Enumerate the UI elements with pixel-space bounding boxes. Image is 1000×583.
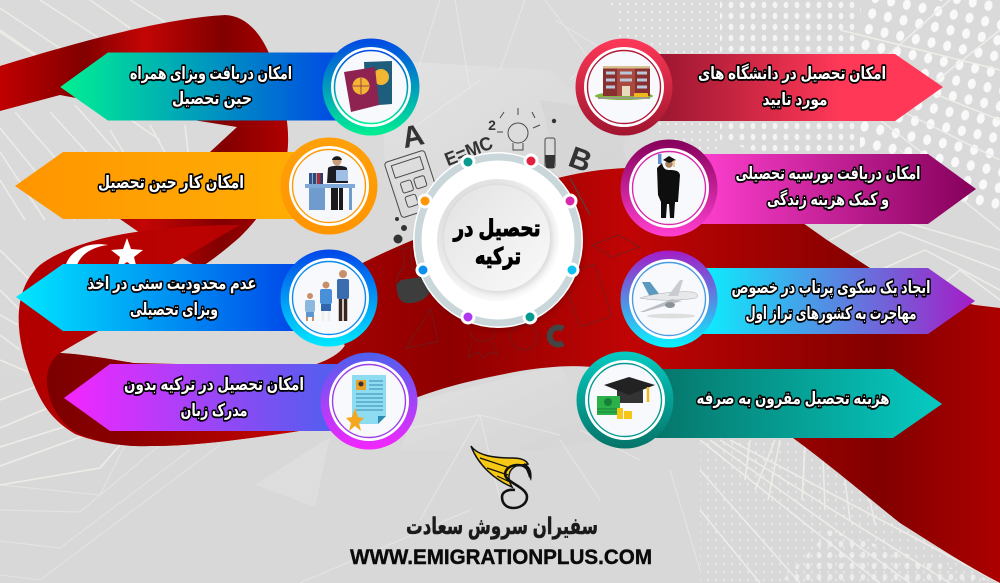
hub title: ترکیه	[475, 243, 521, 270]
panel: scholarship and living allowance	[620, 140, 976, 236]
label: امکان دریافت بورسیه تحصیلی	[736, 164, 920, 184]
logo: bird emblem	[471, 446, 532, 508]
label: مهاجرت به کشورهای تراز اول	[746, 304, 916, 324]
grey wedge between ribbon folds	[60, 300, 345, 370]
panel: study without language certificate	[64, 352, 418, 450]
education doodles	[384, 108, 640, 358]
icon: Turkish flag crescent and star	[65, 238, 143, 269]
label: ایجاد یک سکوی پرتاب در خصوص	[732, 278, 930, 298]
icon circle: graduate	[620, 140, 718, 236]
arrow banner	[650, 369, 942, 438]
label: مدرک زبان	[180, 401, 248, 420]
panel: visa during study	[61, 38, 420, 136]
arrow banner	[61, 53, 340, 120]
arrow banner	[695, 268, 975, 334]
arrow banner	[15, 152, 300, 219]
label: امکان کار حین تحصیل	[98, 173, 244, 193]
panel: affordable tuition	[576, 352, 942, 448]
education doodles: B	[564, 141, 596, 179]
education doodles: 2	[488, 117, 496, 133]
education doodles: E=MC	[442, 133, 496, 171]
label: امکان تحصیل در ترکیه بدون	[124, 375, 304, 395]
lower ribbon fold	[47, 353, 360, 446]
icon circle: family	[280, 250, 378, 346]
label: امکان تحصیل در دانشگاه های	[698, 63, 886, 83]
panel: no age limit	[16, 250, 378, 346]
label	[130, 64, 292, 109]
label	[732, 278, 930, 324]
hub title	[453, 215, 540, 270]
icon circle: document with star	[320, 352, 418, 450]
label: ویزای تحصیلی	[130, 300, 218, 320]
label	[124, 375, 304, 420]
website url: WWW.EMIGRATIONPLUS.COM	[350, 546, 652, 569]
hub markers	[417, 155, 578, 323]
label: و کمک هزینه زندگی	[767, 189, 889, 210]
arrow banner	[16, 264, 300, 331]
education doodles: A	[399, 118, 427, 155]
arrow banner	[650, 54, 943, 121]
icon circle: university building	[576, 38, 672, 136]
hub title: تحصیل در	[453, 215, 540, 242]
label: حین تحصیل	[172, 89, 252, 109]
label: مورد تایید	[762, 90, 828, 110]
arrow banner	[64, 364, 340, 431]
panel: work while studying	[15, 138, 378, 234]
logo wordmark: سفیران سروش سعادت	[406, 513, 598, 540]
label: عدم محدودیت سنی در اخذ	[88, 274, 256, 294]
label	[736, 164, 920, 210]
center hub: study in Turkey	[413, 152, 584, 330]
label	[88, 274, 256, 320]
icon circle: office desk	[280, 138, 378, 234]
icon circle: passports	[322, 38, 420, 136]
panel: springboard for immigration	[620, 250, 975, 348]
icon circle: graduation cap and money	[576, 352, 674, 448]
icon circle: airplane	[620, 250, 718, 348]
label: امکان دریافت ویزای همراه	[130, 64, 292, 84]
panel: approved universities	[576, 38, 943, 136]
label	[698, 63, 886, 110]
arrow banner	[695, 154, 976, 224]
label: هزینه تحصیل مقرون به صرفه	[696, 389, 890, 409]
